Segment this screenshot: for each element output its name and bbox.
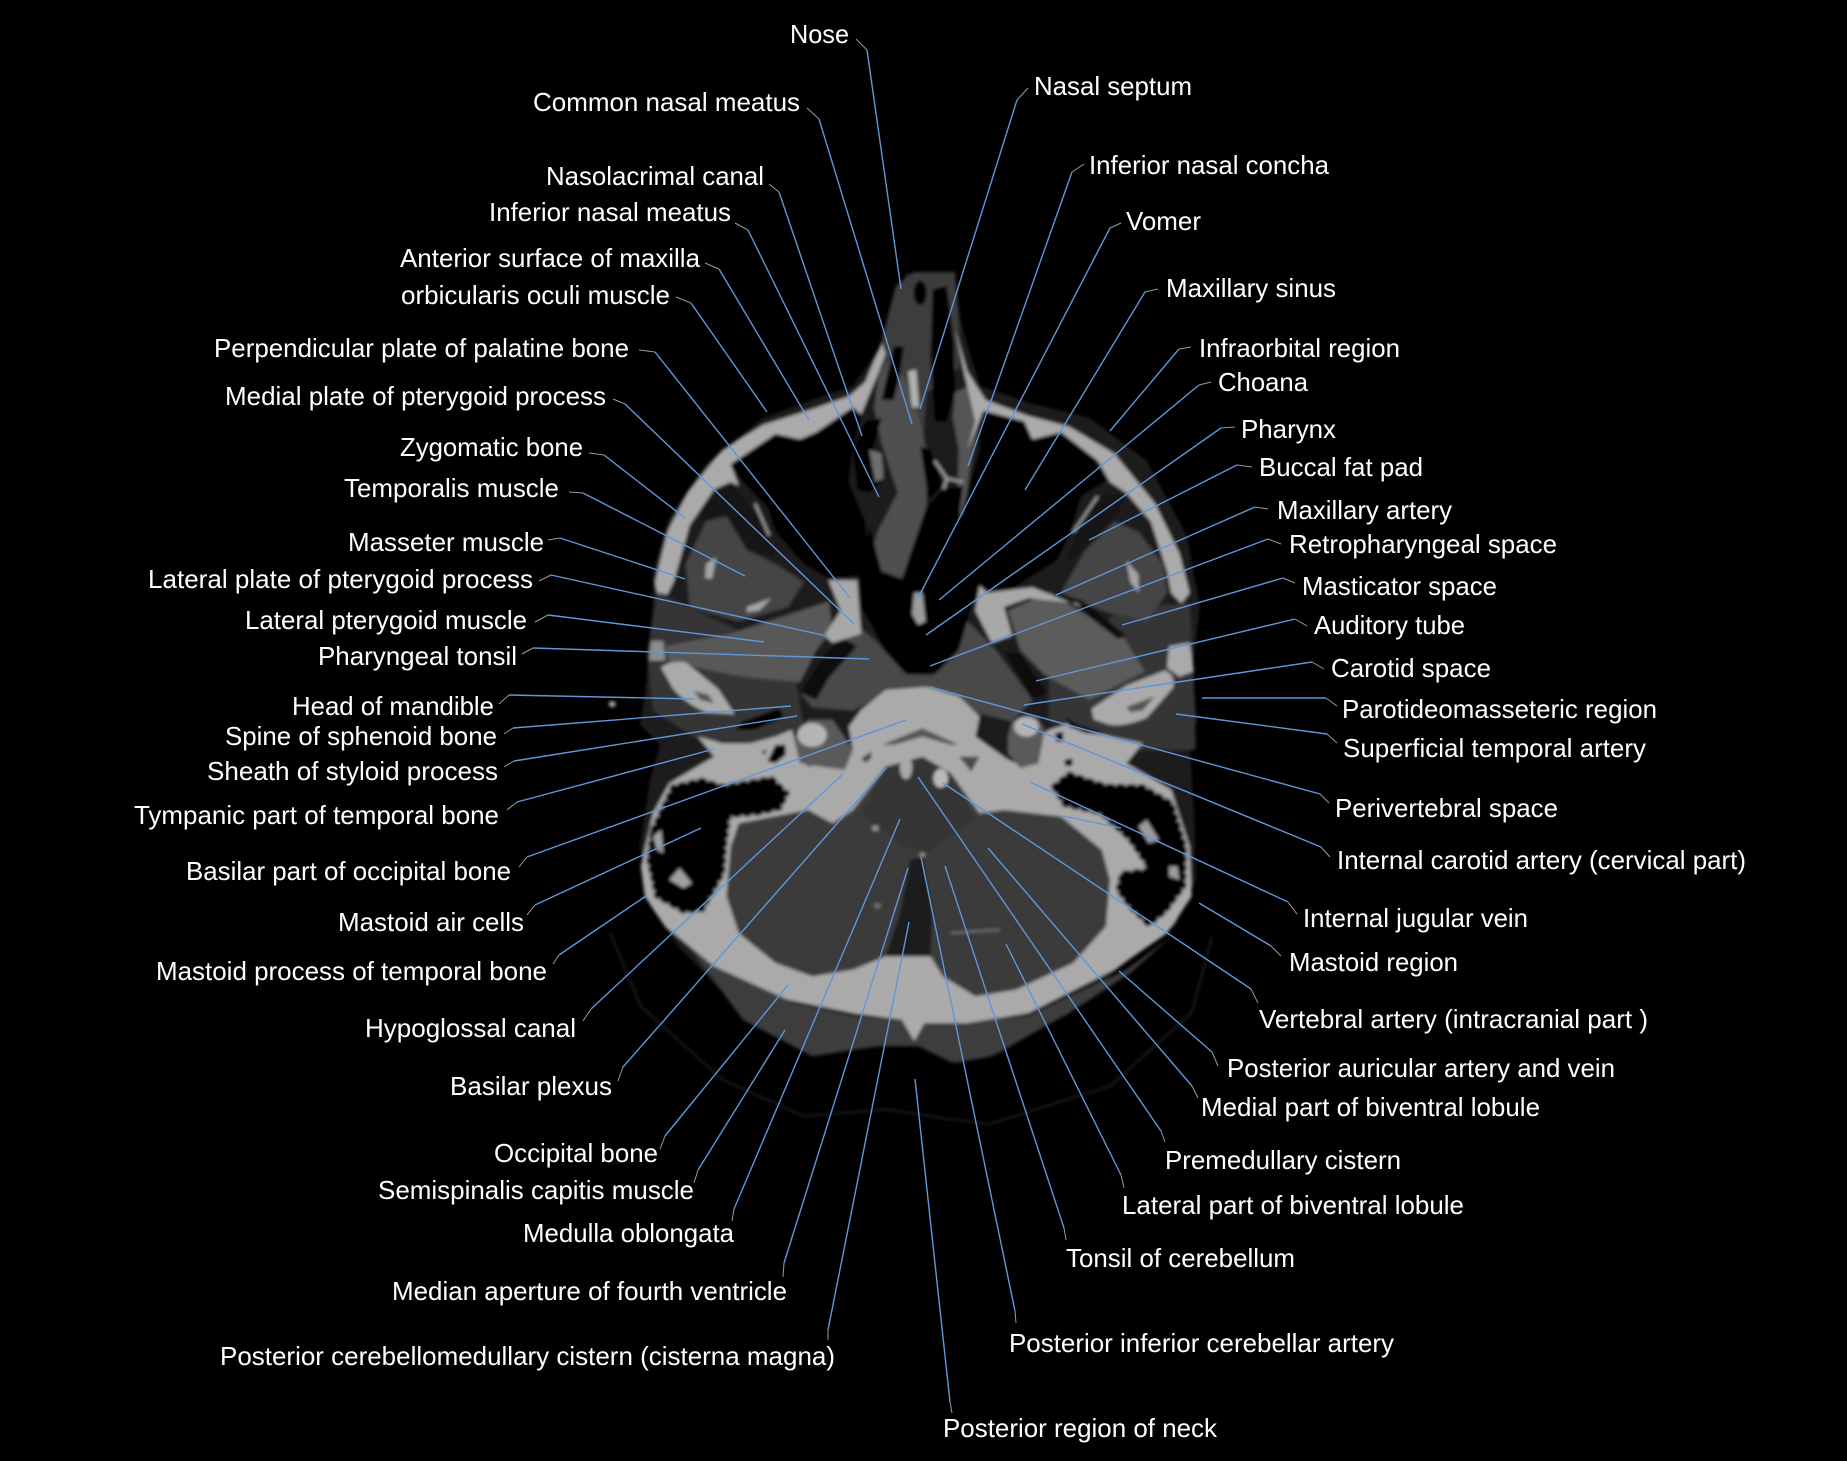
label: Pharyngeal tonsil: Pharyngeal tonsil bbox=[318, 641, 517, 671]
clivus arch bbox=[882, 728, 959, 745]
left zygomatic arch root bbox=[649, 641, 665, 661]
label: Mastoid process of temporal bone: Mastoid process of temporal bone bbox=[156, 956, 547, 986]
label: Occipital bone: Occipital bone bbox=[494, 1138, 658, 1168]
label: Mastoid air cells: Mastoid air cells bbox=[338, 907, 524, 937]
label: Premedullary cistern bbox=[918, 777, 1401, 1175]
label: Buccal fat pad bbox=[1089, 452, 1423, 540]
label: Maxillary sinus: Maxillary sinus bbox=[1166, 273, 1336, 303]
label: Anterior surface of maxilla: Anterior surface of maxilla bbox=[400, 243, 701, 273]
bright vessels bbox=[872, 825, 879, 831]
label: Choana bbox=[939, 367, 1309, 600]
label: Auditory tube bbox=[1036, 610, 1465, 681]
right pterygoid plates bbox=[975, 586, 1081, 643]
label: Zygomatic bone bbox=[400, 432, 685, 518]
label: Posterior auricular artery and vein: Posterior auricular artery and vein bbox=[1227, 1053, 1615, 1083]
label: Masseter muscle bbox=[348, 527, 685, 579]
label: Medulla oblongata bbox=[523, 819, 900, 1248]
soft tissue head outline bbox=[640, 273, 1200, 1063]
dark fat left bbox=[698, 484, 775, 557]
nasopharynx air bbox=[859, 486, 981, 675]
CT scan image bbox=[609, 272, 1212, 1125]
label: Lateral pterygoid muscle bbox=[245, 605, 764, 642]
label: Tympanic part of temporal bone bbox=[134, 749, 714, 830]
label: Basilar part of occipital bone bbox=[186, 720, 906, 886]
label: Parotideomasseteric region: Parotideomasseteric region bbox=[1342, 694, 1657, 724]
facial and masticator soft tissue bbox=[609, 272, 1196, 750]
neck skin line bbox=[610, 933, 1212, 1125]
label: Tonsil of cerebellum: Tonsil of cerebellum bbox=[1066, 1243, 1295, 1273]
maxillary sinus left bbox=[731, 407, 869, 578]
label: Basilar plexus: Basilar plexus bbox=[450, 1071, 612, 1101]
label: Mastoid process of temporal bone bbox=[156, 896, 646, 986]
vermis and fourth ventricle outlet bbox=[886, 856, 933, 956]
label: Nose: Nose bbox=[790, 19, 849, 49]
label: Tonsil of cerebellum bbox=[945, 866, 1295, 1273]
superficial temporal artery spot bbox=[609, 701, 616, 707]
internal carotid left bbox=[797, 723, 827, 747]
nasal air passages bbox=[853, 280, 955, 500]
right zygomatic and maxillary bone bbox=[955, 329, 1190, 603]
lateral pterygoid muscle right bbox=[1008, 593, 1145, 700]
label: Medial part of biventral lobule: Medial part of biventral lobule bbox=[1201, 1092, 1540, 1122]
label: Internal carotid artery bbox=[1022, 724, 1746, 875]
label: Common nasal meatus bbox=[533, 87, 912, 424]
label: Superficial temporal artery bbox=[1176, 714, 1646, 763]
cheek and parotid soft tissue bbox=[647, 593, 1196, 750]
air pockets near the left carotid bbox=[735, 708, 786, 763]
coronoid process bright patches bbox=[705, 557, 1139, 612]
label: Lateral part of biventral lobule: Lateral part of biventral lobule bbox=[1122, 1190, 1464, 1220]
parapharyngeal fat left bbox=[800, 639, 857, 700]
dark fat right bbox=[1065, 493, 1126, 564]
label: Basilar plexus bbox=[450, 768, 886, 1101]
label: Carotid space: Carotid space bbox=[1331, 653, 1491, 683]
label: Posterior region of neck bbox=[915, 1079, 1218, 1443]
label: Masticator space bbox=[1122, 571, 1497, 625]
label: Occipital bone bbox=[494, 985, 788, 1168]
label: Medial plate of pterygoid process: Medial plate of pterygoid process bbox=[225, 381, 606, 411]
label: Nasolacrimal canal: Nasolacrimal canal bbox=[546, 161, 764, 191]
label: Infraorbital region bbox=[1110, 333, 1400, 431]
right turbinate band bbox=[953, 386, 977, 528]
air pockets near the right carotid bbox=[1055, 717, 1110, 766]
masticator fat stripe right bbox=[1053, 593, 1126, 639]
label: Posterior auricular artery and vein bbox=[1119, 971, 1615, 1083]
label: Inferior nasal concha: Inferior nasal concha bbox=[1089, 150, 1330, 180]
parapharyngeal fat right bbox=[1004, 652, 1047, 700]
left mandibular marrow bbox=[694, 691, 714, 703]
label: Masticator space: Masticator space bbox=[1302, 571, 1497, 601]
label: Superficial temporal artery: Superficial temporal artery bbox=[1343, 733, 1646, 763]
label: Posterior inferior cerebellar artery: Posterior inferior cerebellar artery bbox=[1009, 1328, 1394, 1358]
nose soft tissue bbox=[877, 272, 959, 450]
label: Spine of sphenoid bone bbox=[225, 706, 791, 751]
posterior neck muscle bbox=[682, 936, 1171, 1063]
label: Mastoid region bbox=[1199, 903, 1458, 977]
temporal fossa muscle right bbox=[1061, 521, 1167, 621]
label: Medial plate of pterygoid process bbox=[225, 381, 854, 624]
label: Parotideomasseteric region bbox=[1202, 694, 1657, 724]
label: Temporalis muscle bbox=[344, 473, 745, 576]
label: Maxillary artery bbox=[1056, 495, 1452, 595]
label: Maxillary artery: Maxillary artery bbox=[1277, 495, 1452, 525]
label: Premedullary cistern: Premedullary cistern bbox=[1165, 1145, 1401, 1175]
label: Sheath of styloid process: Sheath of styloid process bbox=[207, 756, 498, 786]
label: Internal jugular vein bbox=[1030, 782, 1528, 933]
label: Posterior cerebellomedullary cistern: Posterior cerebellomedullary cistern (cisterna magna) bbox=[220, 1341, 835, 1371]
right mandibular marrow bbox=[1126, 696, 1155, 712]
maxillary sinus right bbox=[957, 411, 1110, 593]
temporal fossa muscle left bbox=[686, 516, 804, 621]
label: Spine of sphenoid bone: Spine of sphenoid bone bbox=[225, 721, 497, 751]
label: Temporalis muscle: Temporalis muscle bbox=[344, 473, 559, 503]
label: Posterior cerebellomedullary cistern bbox=[220, 922, 909, 1371]
label: Sheath of styloid process bbox=[207, 716, 797, 786]
label: Tympanic part of temporal bone: Tympanic part of temporal bone bbox=[134, 800, 499, 830]
label: Retropharyngeal space bbox=[930, 529, 1557, 666]
label: Medulla oblongata: Medulla oblongata bbox=[523, 1218, 735, 1248]
mastoid septa left bbox=[653, 830, 692, 888]
label: orbicularis oculi muscle: orbicularis oculi muscle bbox=[401, 280, 670, 310]
label: Internal carotid artery: Internal carotid artery (cervical part) bbox=[1337, 845, 1746, 875]
cerebellum bbox=[726, 757, 1110, 996]
label: Mastoid air cells bbox=[338, 828, 701, 937]
label: Lateral plate of pterygoid process: Lateral plate of pterygoid process bbox=[148, 564, 533, 594]
occipital crest inside bbox=[845, 956, 967, 1003]
label: Median aperture of fourth ventricle bbox=[392, 868, 908, 1306]
label: Pharynx bbox=[926, 414, 1336, 635]
label: Hypoglossal canal bbox=[365, 774, 843, 1043]
label: Perpendicular plate of palatine bone: Perpendicular plate of palatine bone bbox=[214, 333, 629, 363]
label: orbicularis oculi muscle bbox=[401, 280, 767, 412]
label: Hypoglossal canal: Hypoglossal canal bbox=[365, 1013, 576, 1043]
skull base and posterior cranial fossa bbox=[610, 687, 1212, 1125]
left zygomatic and maxillary bone bbox=[655, 343, 886, 595]
right zygomatic arch root bbox=[1167, 643, 1194, 677]
label: Maxillary sinus bbox=[1025, 273, 1336, 490]
label: Lateral plate of pterygoid process bbox=[148, 564, 827, 636]
label: Inferior nasal concha bbox=[968, 150, 1330, 466]
label: Perivertebral space: Perivertebral space bbox=[1335, 793, 1558, 823]
mastoid air cells right bbox=[1054, 774, 1184, 925]
jugular and carotid region left bbox=[794, 720, 853, 770]
label: Vertebral artery: Vertebral artery (intracranial part ) bbox=[1259, 1004, 1648, 1034]
label: Internal jugular vein: Internal jugular vein bbox=[1303, 903, 1528, 933]
label: Common nasal meatus: Common nasal meatus bbox=[533, 87, 800, 117]
label: Head of mandible: Head of mandible bbox=[292, 691, 494, 721]
medulla bbox=[861, 757, 975, 853]
label: Masseter muscle: Masseter muscle bbox=[348, 527, 544, 557]
label: Vomer bbox=[918, 206, 1201, 598]
label: Lateral part of biventral lobule bbox=[1006, 944, 1464, 1220]
label: Basilar part of occipital bone: Basilar part of occipital bone bbox=[186, 856, 511, 886]
lateral pterygoid muscle left bbox=[665, 602, 833, 682]
central nasal mass bbox=[869, 357, 926, 596]
label: Choana: Choana bbox=[1218, 367, 1309, 397]
label: Pharynx: Pharynx bbox=[1241, 414, 1336, 444]
label: Inferior nasal meatus bbox=[489, 197, 879, 497]
nasal bright cartilage bbox=[908, 370, 919, 407]
left pterygoid plates bbox=[824, 580, 861, 643]
label: Perivertebral space bbox=[930, 687, 1558, 823]
label: Semispinalis capitis muscle bbox=[378, 1030, 785, 1205]
label: Vomer: Vomer bbox=[1126, 206, 1201, 236]
label: Nasal septum bbox=[920, 71, 1192, 409]
label: Nasal septum: Nasal septum bbox=[1034, 71, 1192, 101]
mastoid septa right bbox=[1139, 820, 1179, 880]
vomer bbox=[912, 593, 926, 625]
label: Posterior region of neck: Posterior region of neck bbox=[943, 1413, 1218, 1443]
label: Carotid space bbox=[1024, 653, 1491, 705]
right mandibular head bbox=[1092, 671, 1174, 725]
mastoid air cells left bbox=[649, 778, 787, 911]
label: Inferior nasal meatus: Inferior nasal meatus bbox=[489, 197, 731, 227]
label: Pharyngeal tonsil bbox=[318, 641, 869, 671]
jugular and carotid region right bbox=[1008, 717, 1045, 768]
label: Retropharyngeal space: Retropharyngeal space bbox=[1289, 529, 1557, 559]
left mandibular head bbox=[661, 662, 735, 714]
internal carotid right bbox=[1014, 717, 1039, 737]
label: Semispinalis capitis muscle: Semispinalis capitis muscle bbox=[378, 1175, 694, 1205]
label: Nose bbox=[790, 19, 901, 289]
label: Buccal fat pad: Buccal fat pad bbox=[1259, 452, 1423, 482]
thin orbital walls bbox=[755, 496, 1098, 536]
label: Mastoid region: Mastoid region bbox=[1289, 947, 1458, 977]
vertebral arteries bbox=[933, 769, 948, 788]
label: Lateral pterygoid muscle: Lateral pterygoid muscle bbox=[245, 605, 527, 635]
label: Posterior inferior cerebellar artery bbox=[921, 857, 1394, 1358]
label: Median aperture of fourth ventricle: Median aperture of fourth ventricle bbox=[392, 1276, 787, 1306]
prevertebral and pharyngeal muscle bbox=[800, 621, 1032, 721]
conchae bbox=[918, 461, 963, 618]
label: Vertebral artery bbox=[943, 783, 1648, 1034]
label: Perpendicular plate of palatine bone bbox=[214, 333, 850, 598]
label: Zygomatic bone: Zygomatic bone bbox=[400, 432, 583, 462]
label: Nasolacrimal canal bbox=[546, 161, 862, 436]
label: Head of mandible bbox=[292, 691, 694, 721]
label: Auditory tube: Auditory tube bbox=[1314, 610, 1465, 640]
label: Anterior surface of maxilla bbox=[400, 243, 809, 420]
label: Medial part of biventral lobule bbox=[988, 848, 1540, 1122]
skull bone ring and petrous bone bbox=[641, 687, 1192, 1041]
label: Infraorbital region: Infraorbital region bbox=[1199, 333, 1400, 363]
